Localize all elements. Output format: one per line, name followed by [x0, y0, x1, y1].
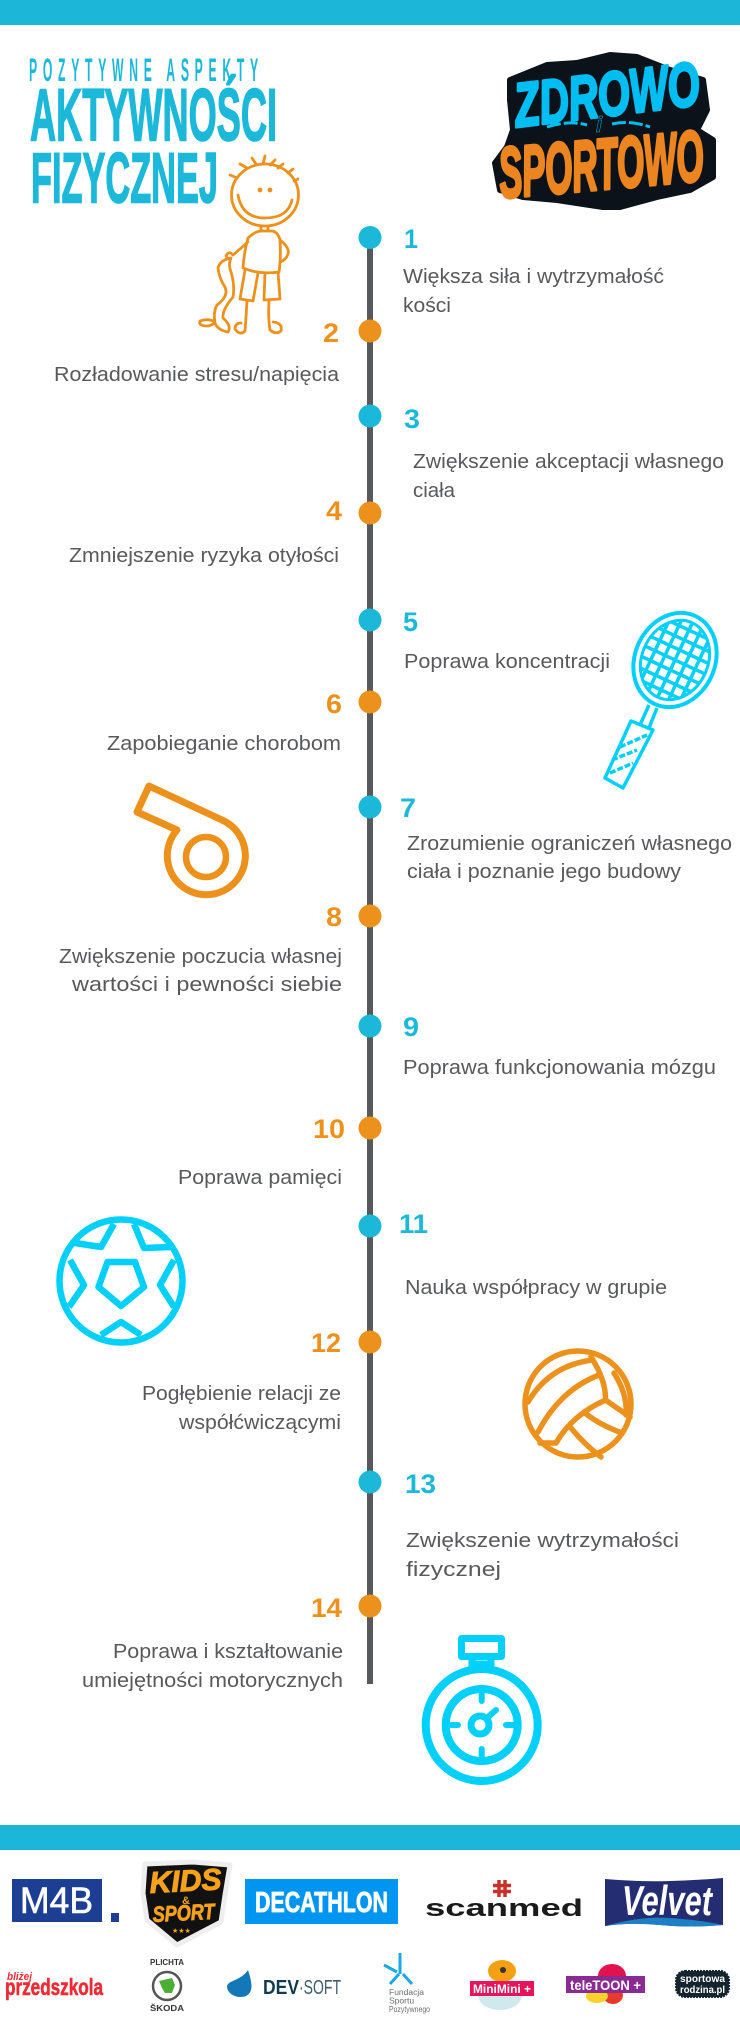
logo: bliżej przedszkola: przedszkola [5, 1974, 103, 2000]
item 7 [358, 793, 732, 883]
item 5: Poprawa koncentracji [404, 650, 610, 673]
logo: Kids & Sport [143, 1862, 230, 1945]
logo: Dev-Soft: ·SOFT [299, 1977, 341, 1999]
item 9: Poprawa funkcjonowania mózgu [403, 1056, 716, 1079]
item 13: 13 [405, 1469, 436, 1499]
item 14: 14 [311, 1593, 342, 1623]
logo: Dev-Soft [227, 1970, 341, 1999]
text: AKTYWNOŚCI [30, 74, 277, 156]
logo: Kids & Sport: KIDS [149, 1863, 222, 1900]
item 13 [358, 1469, 679, 1581]
item 1: kości [403, 294, 451, 317]
logo: sportowa rodzina [676, 1971, 729, 1997]
icon: soccer ball [60, 1220, 182, 1342]
icon: volleyball [525, 1351, 631, 1457]
item 1: Większa siła i wytrzymałość [403, 265, 664, 288]
item 11: 11 [399, 1209, 428, 1239]
logo: bliżej przedszkola: bliżej [7, 1971, 33, 1983]
item 8: Zwiększenie poczucia własnej [59, 945, 342, 968]
item 5: 5 [403, 607, 418, 637]
item 2 [54, 318, 382, 386]
logo: Fundacja Sportu Pozytywnego: Pozytywnego [389, 2004, 430, 2014]
logo: bliżej przedszkola [5, 1971, 103, 2000]
item 2: 2 [323, 318, 339, 348]
item 3: Zwiększenie akceptacji własnego [413, 450, 724, 473]
illustration: boy with skipping rope [200, 156, 298, 333]
item 1 [358, 224, 664, 317]
item 13: Zwiększenie wytrzymałości [406, 1529, 679, 1552]
item 8: 8 [326, 902, 342, 932]
logo: sportowa rodzina: rodzina.pl [680, 1985, 725, 1996]
logo: Plichta Skoda: PLICHTA [150, 1958, 184, 1967]
item 4: Zmniejszenie ryzyka otyłości [69, 544, 339, 567]
item 8 [59, 902, 382, 996]
logo: Kids & Sport: ★★★ [172, 1927, 191, 1935]
item 7: 7 [400, 793, 416, 823]
item 8: wartości i pewności siebie [71, 973, 342, 996]
item 14: Poprawa i kształtowanie [113, 1640, 343, 1663]
logo: Plichta Skoda: ŠKODA [150, 2004, 184, 2013]
logo: Fundacja Sportu Pozytywnego: Sportu [389, 1996, 414, 2006]
item 4 [69, 496, 382, 567]
logo: MiniMini+: MiniMini + [473, 1982, 531, 1996]
item 9: 9 [403, 1012, 419, 1042]
item 2: Rozładowanie stresu/napięcia [54, 363, 340, 386]
logo: M4B: M4B [20, 1880, 93, 1921]
logo: Decathlon [245, 1879, 398, 1924]
title [29, 53, 277, 218]
item 11: Nauka współpracy w grupie [405, 1276, 667, 1299]
logo: sportowa rodzina: sportowa [680, 1974, 725, 1985]
logo: Fundacja Sportu Pozytywnego: Fundacja [389, 1987, 424, 1997]
bottom bar [0, 1825, 740, 1850]
item 6: 6 [326, 689, 342, 719]
logo: teleTOON+: teleTOON + [570, 1977, 641, 1993]
item 10 [178, 1114, 382, 1189]
item 1: 1 [404, 224, 418, 254]
top bar [0, 0, 740, 25]
item 12 [142, 1328, 382, 1434]
item 10: 10 [313, 1114, 345, 1144]
logo: Plichta Skoda [150, 1958, 184, 2013]
title: POZYTYWNE ASPEKTY [29, 53, 258, 89]
logo: Zdrowo i Sportowo: i [596, 112, 603, 137]
item 14: umiejętności motorycznych [82, 1669, 343, 1692]
item 7: ciała i poznanie jego budowy [407, 860, 682, 883]
logo: Kids & Sport: & [182, 1895, 190, 1907]
item 11 [358, 1209, 667, 1299]
item 6 [107, 689, 382, 755]
item 12: 12 [311, 1328, 341, 1358]
item 6: Zapobieganie chorobom [107, 732, 341, 755]
item 7: Zrozumienie ograniczeń własnego [407, 832, 732, 855]
item 14 [82, 1593, 382, 1692]
item 5 [358, 607, 610, 673]
item 10: Poprawa pamięci [178, 1166, 342, 1189]
item 12: współćwiczącymi [178, 1411, 341, 1434]
item 4: 4 [326, 496, 342, 526]
logo: Decathlon: DECATHLON [255, 1887, 388, 1919]
logo: Fundacja Sportu Pozytywnego [384, 1953, 430, 2014]
logo: Scanmed: scanmed [425, 1895, 583, 1922]
item 3: ciała [413, 479, 456, 502]
title: FIZYCZNEJ [31, 140, 218, 218]
item 9 [358, 1012, 716, 1079]
logo: MiniMini+ [470, 1960, 534, 2010]
item 3: 3 [404, 404, 420, 434]
timeline spine [367, 237, 373, 1684]
icon: stopwatch [426, 1638, 538, 1781]
item 13: fizycznej [406, 1558, 501, 1581]
logo: M4B [12, 1879, 119, 1922]
icon: whistle [137, 786, 245, 895]
logo: teleTOON+ [566, 1964, 645, 2004]
logo: Scanmed [425, 1880, 583, 1922]
logo: Zdrowo i Sportowo [495, 50, 713, 214]
item 12: Pogłębienie relacji ze [142, 1382, 341, 1405]
logo: Dev-Soft: DEV [263, 1977, 300, 1999]
icon: badminton racket [603, 610, 719, 790]
logo: Kids & Sport: SPORT [152, 1899, 216, 1927]
item 3 [358, 404, 724, 502]
